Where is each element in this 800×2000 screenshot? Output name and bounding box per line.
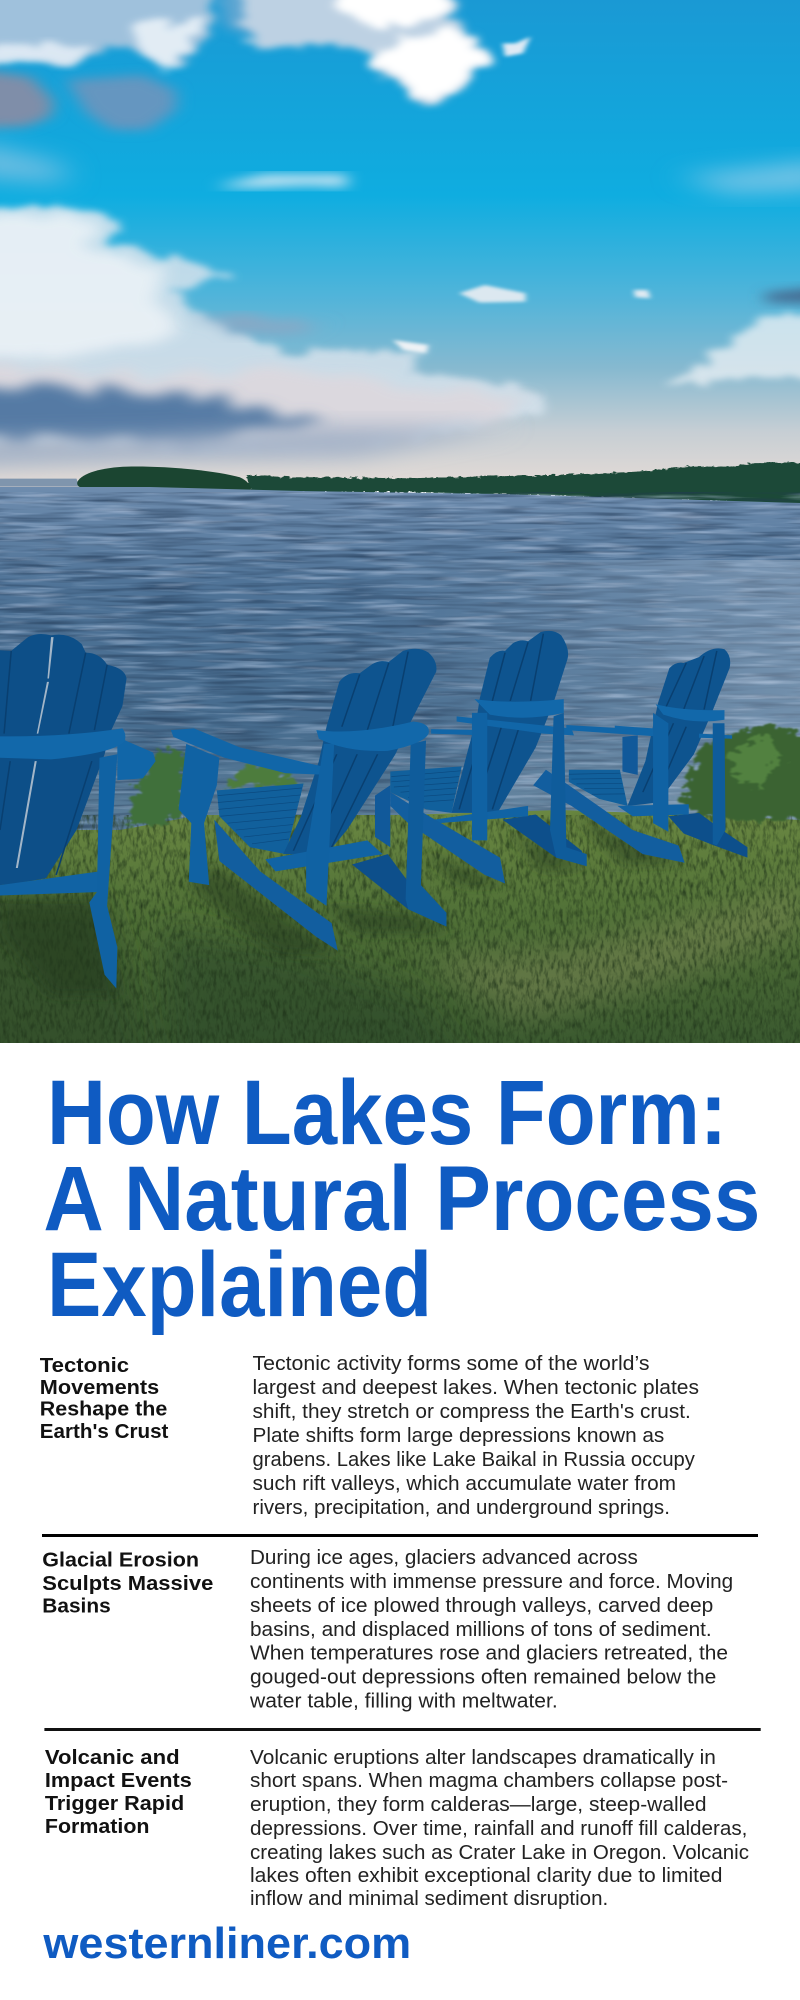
title	[43, 1062, 760, 1336]
body: glacial: During ice ages, glaciers advanced across	[250, 1547, 638, 1569]
body: volcanic: lakes often exhibit exceptional clarity due to limited	[250, 1865, 722, 1887]
chair 3	[375, 631, 587, 883]
body: glacial	[249, 1547, 733, 1712]
body: volcanic: short spans. When magma chambers collapse post-	[250, 1770, 728, 1792]
heading: tectonic: Earth's Crust	[40, 1420, 169, 1443]
body: glacial: sheets of ice plowed through valleys, carved deep	[250, 1595, 713, 1617]
body: tectonic	[252, 1353, 699, 1519]
body: tectonic: rivers, precipitation, and underground springs.	[252, 1497, 670, 1519]
body: tectonic: largest and deepest lakes. When tectonic plates	[252, 1377, 699, 1399]
body: glacial: water table, filling with meltwater.	[249, 1690, 558, 1712]
heading: volcanic: Formation	[45, 1815, 150, 1838]
grass and bushes	[0, 723, 800, 1080]
body: glacial: When temperatures rose and glaciers retreated, the	[250, 1642, 728, 1664]
heading: volcanic	[45, 1746, 192, 1838]
body: glacial: basins, and displaced millions of tons of sediment.	[250, 1619, 712, 1641]
four blue chairs	[0, 631, 747, 995]
tree line far shore	[77, 463, 800, 505]
body: volcanic: inflow and minimal sediment disruption.	[250, 1888, 608, 1910]
sky	[0, 0, 800, 505]
body: volcanic	[250, 1747, 749, 1910]
body: tectonic: Plate shifts form large depressions known as	[252, 1425, 664, 1447]
body: glacial: continents with immense pressure and force. Moving	[250, 1571, 733, 1593]
body: tectonic: shift, they stretch or compress the Earth's crust.	[252, 1401, 691, 1423]
heading: tectonic: Movements	[40, 1376, 159, 1399]
body: tectonic: Tectonic activity forms some of the world’s	[252, 1353, 650, 1375]
heading: tectonic: Reshape the	[40, 1398, 167, 1420]
body: tectonic: such rift valleys, which accumulate water from	[252, 1473, 676, 1495]
body: volcanic: creating lakes such as Crater Lake in Oregon. Volcanic	[250, 1842, 749, 1864]
chair 2	[171, 649, 446, 951]
body: volcanic: eruption, they form calderas—large, steep-walled	[250, 1794, 707, 1816]
title: Explained	[47, 1234, 432, 1336]
heading: glacial: Glacial Erosion	[42, 1549, 199, 1572]
heading: volcanic: Volcanic and	[45, 1746, 180, 1769]
chair 4	[533, 648, 747, 863]
body: glacial: gouged-out depressions often remained below the	[250, 1666, 716, 1688]
heading: tectonic: Tectonic	[40, 1354, 129, 1377]
body: volcanic: Volcanic eruptions alter landscapes dramatically in	[250, 1747, 716, 1769]
heading: volcanic: Impact Events	[45, 1769, 192, 1792]
heading: volcanic: Trigger Rapid	[45, 1792, 184, 1815]
title: How Lakes Form:	[47, 1062, 727, 1164]
heading: tectonic	[40, 1354, 169, 1443]
heading: glacial: Basins	[42, 1595, 111, 1618]
body: tectonic: grabens. Lakes like Lake Baikal in Russia occupy	[252, 1449, 695, 1471]
chair 1	[0, 634, 156, 989]
heading: glacial: Sculpts Massive	[42, 1572, 213, 1595]
body: volcanic: depressions. Over time, rainfall and runoff fill calderas,	[250, 1818, 747, 1840]
section: volcanic and impact	[45, 1746, 749, 1910]
section: glacial erosion	[42, 1547, 733, 1712]
heading: glacial	[42, 1549, 213, 1618]
section: tectonic movements	[40, 1353, 699, 1519]
footer url: westernliner.com	[42, 1919, 411, 1968]
lake water	[0, 487, 800, 832]
chair shadows	[0, 813, 684, 995]
hero photo: lake with blue chairs	[0, 0, 800, 1080]
